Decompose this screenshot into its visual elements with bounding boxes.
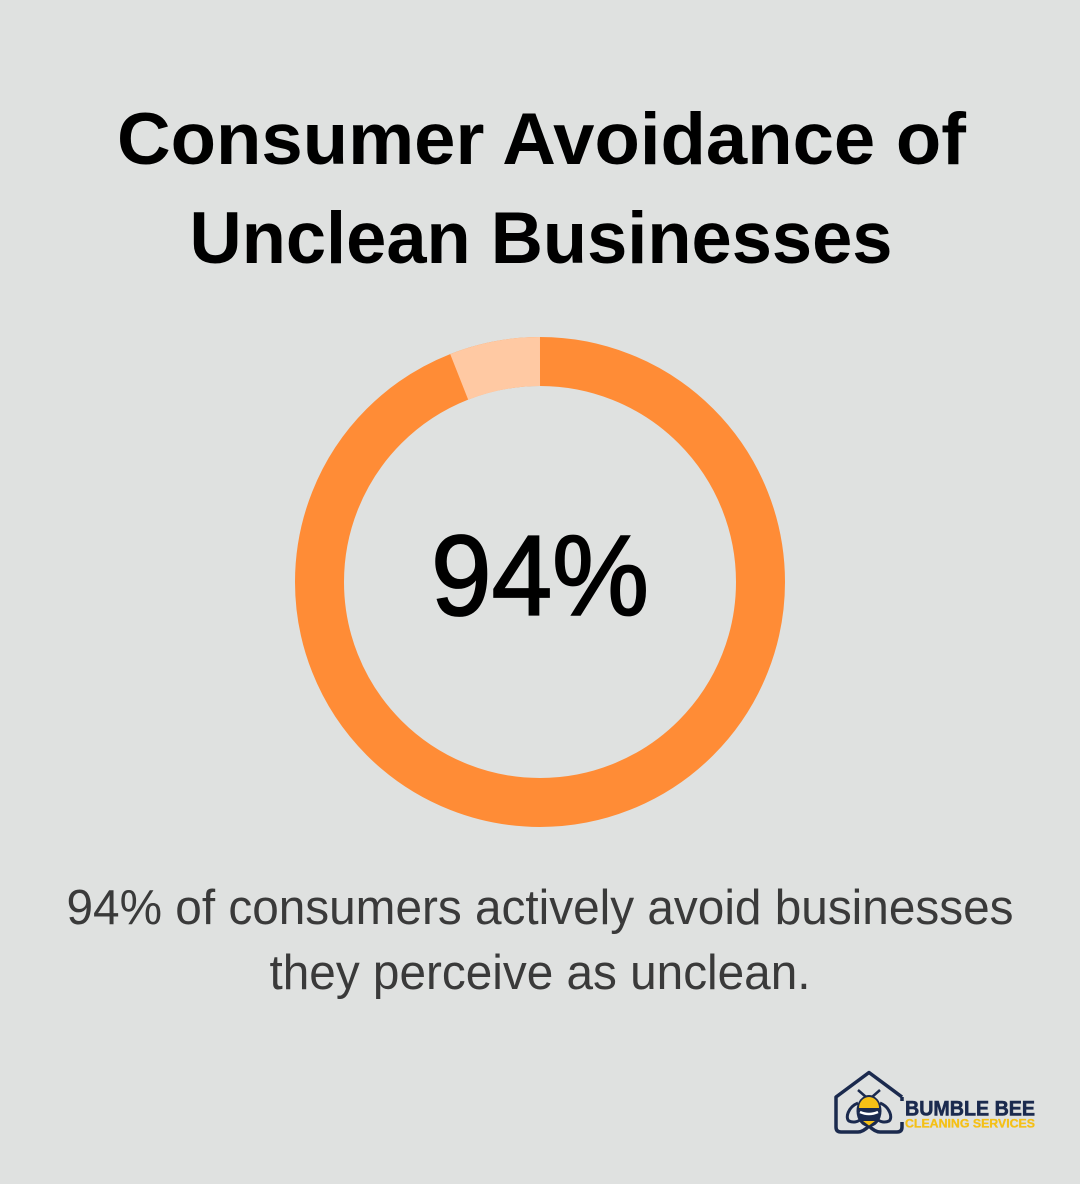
donut chart: 94%	[320, 362, 760, 802]
title: Unclean Businesses	[190, 198, 892, 279]
icon: house with bee	[836, 1072, 902, 1132]
title: Consumer Avoidance of	[117, 99, 967, 180]
logo wordmark: BUMBLE BEE	[905, 1098, 1035, 1120]
description	[66, 881, 1014, 1000]
logo tagline: CLEANING SERVICES	[905, 1116, 1035, 1130]
remaining 6% segment	[459, 362, 540, 377]
logo: Bumble Bee Cleaning Services	[836, 1072, 1035, 1132]
description: they perceive as unclean.	[270, 946, 810, 1000]
title	[117, 99, 967, 279]
center value: 94%	[431, 513, 649, 640]
description: 94% of consumers actively avoid businesses	[66, 881, 1014, 935]
